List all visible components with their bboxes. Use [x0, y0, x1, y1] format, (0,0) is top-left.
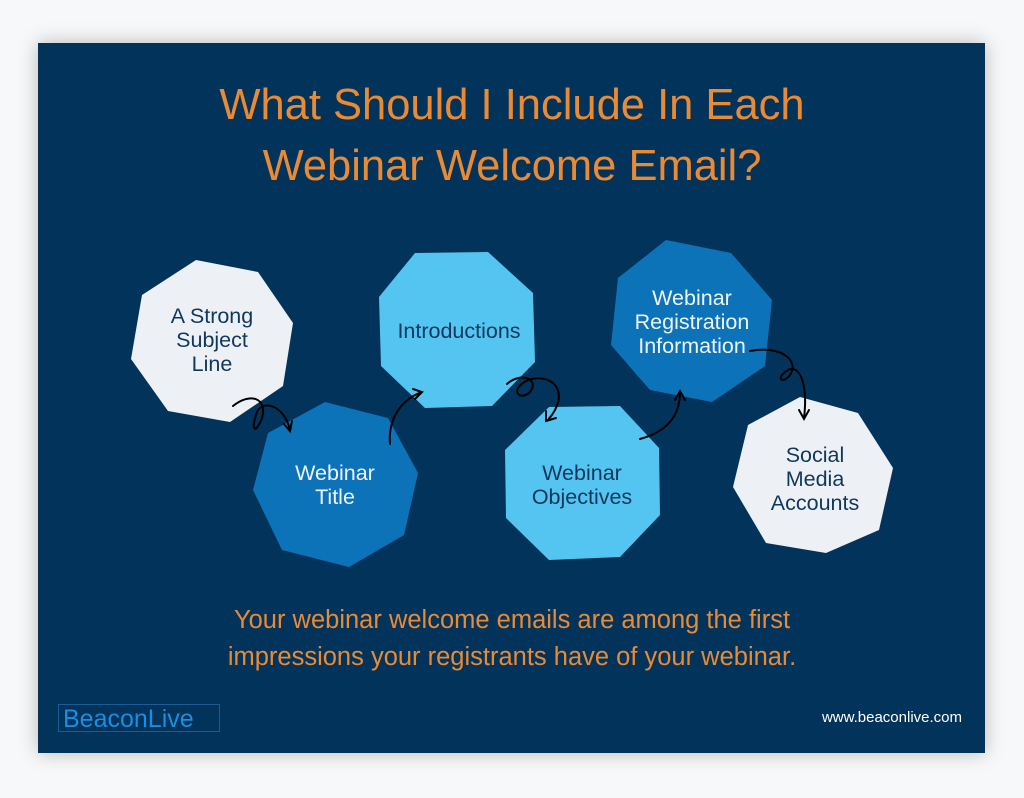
- shape: webinar title: [253, 402, 418, 567]
- label: social media: [770, 443, 859, 515]
- label: registration: Webinar: [652, 286, 732, 310]
- label: webinar title: Webinar: [295, 461, 375, 485]
- shape: objectives: [505, 406, 660, 560]
- shape: introductions: [379, 252, 535, 408]
- website: www.beaconlive.com: [822, 709, 962, 726]
- title: What Should I Include In Each: [219, 81, 805, 129]
- arrows: [233, 350, 809, 444]
- bottom text: Your webinar welcome emails are among the first: [234, 606, 790, 634]
- label: social media: Media: [786, 467, 844, 491]
- label: objectives: Objectives: [532, 485, 632, 509]
- label: subject line: [170, 304, 253, 376]
- shape: social media: [733, 397, 893, 553]
- label: subject line: Line: [192, 352, 232, 376]
- logo: BeaconLive: [63, 705, 194, 733]
- label: webinar title: [295, 461, 375, 509]
- label: objectives: Webinar: [542, 461, 622, 485]
- title: [219, 81, 805, 190]
- label: subject line: Subject: [176, 328, 248, 352]
- title: Webinar Welcome Email?: [263, 142, 761, 190]
- label: introductions: Introductions: [397, 319, 521, 343]
- label: registration: Registration: [635, 310, 749, 334]
- label: subject line: A Strong: [171, 304, 253, 328]
- label: objectives: [532, 461, 632, 509]
- bottom text: [228, 606, 796, 671]
- label: social media: Social: [786, 443, 844, 467]
- label: social media: Accounts: [771, 491, 859, 515]
- label: registration: [635, 286, 749, 358]
- bottom text: impressions your registrants have of your webinar.: [228, 643, 796, 671]
- shape: registration: [611, 240, 772, 402]
- label: webinar title: Title: [315, 485, 355, 509]
- shape: subject line: [131, 260, 293, 422]
- label: registration: Information: [638, 334, 746, 358]
